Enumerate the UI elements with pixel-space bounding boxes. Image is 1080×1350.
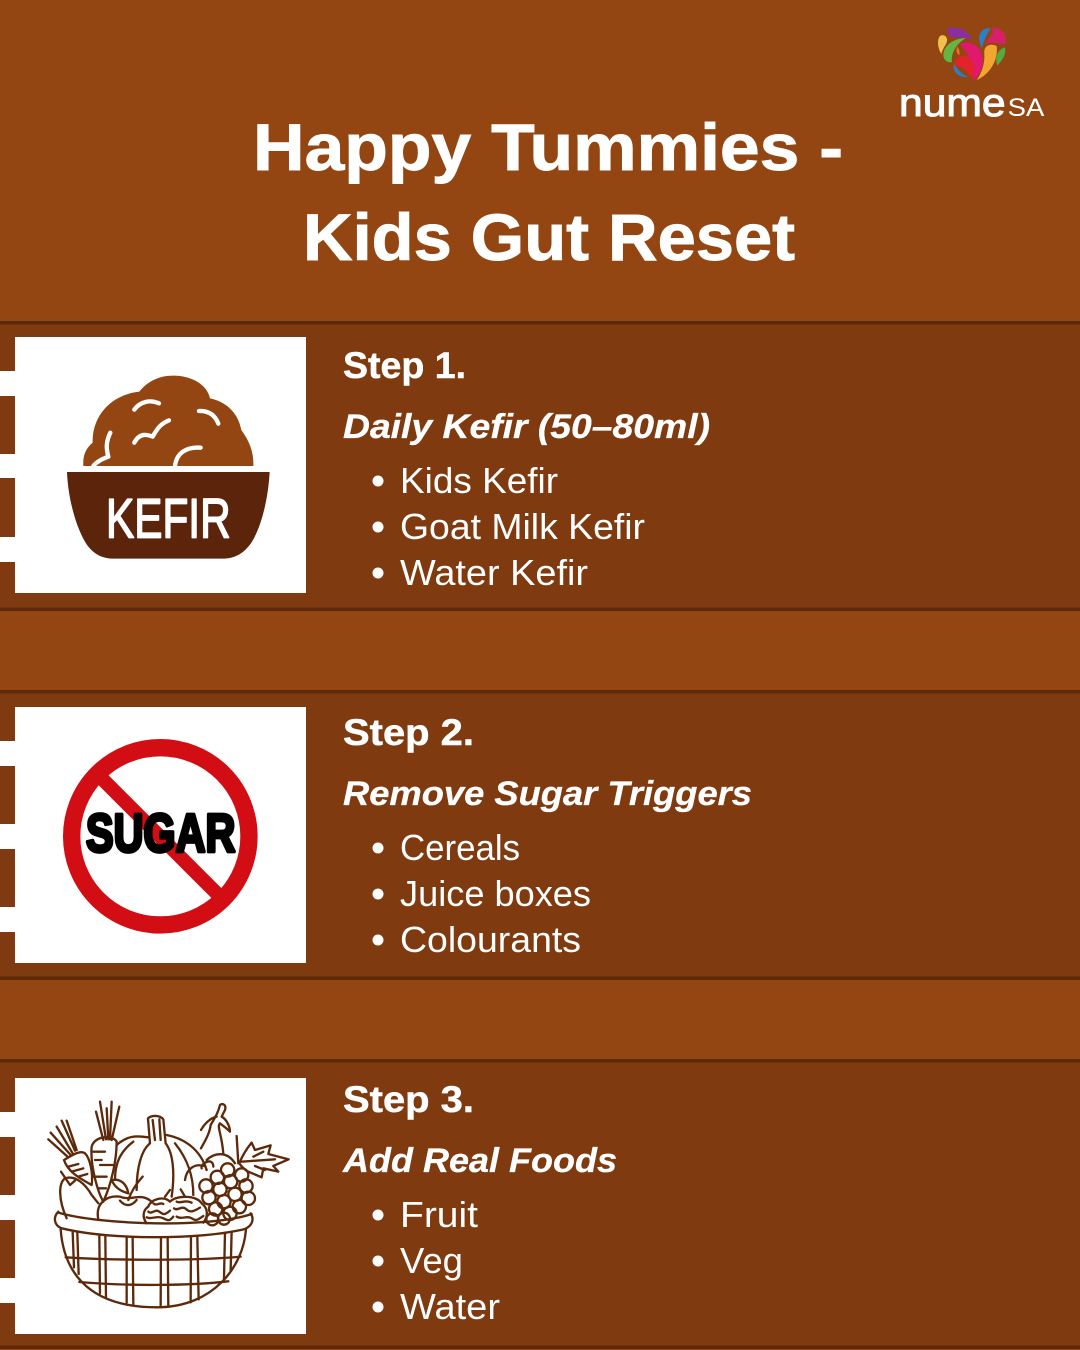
title: Happy Tummies - bbox=[253, 110, 843, 184]
icon: colourful heart bbox=[938, 27, 1006, 81]
step 3 list: Water bbox=[400, 1286, 500, 1327]
logo: numesa bbox=[899, 27, 1045, 125]
step 3 list bbox=[372, 1194, 500, 1327]
grapes bbox=[199, 1136, 255, 1225]
icon: no sugar bbox=[72, 748, 249, 925]
step 3 heading: Step 3. bbox=[343, 1079, 474, 1120]
title bbox=[253, 110, 843, 274]
panel: step 2 bbox=[0, 690, 1080, 980]
wordmark: nume bbox=[899, 81, 1006, 125]
carrot left bbox=[48, 1121, 77, 1157]
step 3 list: Fruit bbox=[400, 1194, 478, 1235]
title: Kids Gut Reset bbox=[303, 200, 795, 274]
pumpkin bbox=[117, 1135, 207, 1170]
panel: step 1 bbox=[0, 321, 1080, 611]
carrot middle bbox=[96, 1102, 119, 1140]
step 1 list bbox=[372, 460, 645, 593]
step 2 subheading: Remove Sugar Triggers bbox=[343, 775, 752, 813]
apple bbox=[98, 1196, 152, 1219]
notched white card bbox=[0, 337, 306, 593]
step 2 list bbox=[372, 827, 591, 960]
panel: step 3 bbox=[0, 1059, 1080, 1349]
step 3 subheading: Add Real Foods bbox=[342, 1142, 617, 1180]
wordmark bbox=[899, 81, 1045, 125]
pear bbox=[60, 1178, 98, 1218]
basket rim bbox=[55, 1212, 253, 1237]
icon: kefir bowl: KEFIR bbox=[106, 486, 231, 549]
icon: basket of fruit and vegetables bbox=[48, 1102, 289, 1307]
cauliflowers bbox=[144, 1197, 207, 1223]
step 1 list: Goat Milk Kefir bbox=[400, 506, 645, 547]
step 1 subheading: Daily Kefir (50–80ml) bbox=[343, 408, 710, 446]
step 1 heading: Step 1. bbox=[343, 345, 466, 386]
step 2 list: Juice boxes bbox=[400, 873, 591, 914]
step 1 list: Kids Kefir bbox=[400, 460, 558, 501]
eggplant bbox=[201, 1104, 230, 1153]
notched white card bbox=[0, 1078, 306, 1334]
step 2 list: Cereals bbox=[400, 827, 520, 868]
basket body bbox=[61, 1229, 246, 1307]
icon: no sugar: SUGAR bbox=[86, 804, 235, 863]
step 2 heading: Step 2. bbox=[343, 712, 474, 753]
leaf bbox=[239, 1143, 289, 1177]
notched white card bbox=[0, 707, 306, 963]
step 2 list: Colourants bbox=[400, 919, 581, 960]
icon: kefir bowl bbox=[67, 376, 270, 559]
wordmark: SA bbox=[1008, 95, 1045, 122]
step 3 list: Veg bbox=[400, 1240, 463, 1281]
step 1 list: Water Kefir bbox=[400, 552, 588, 593]
